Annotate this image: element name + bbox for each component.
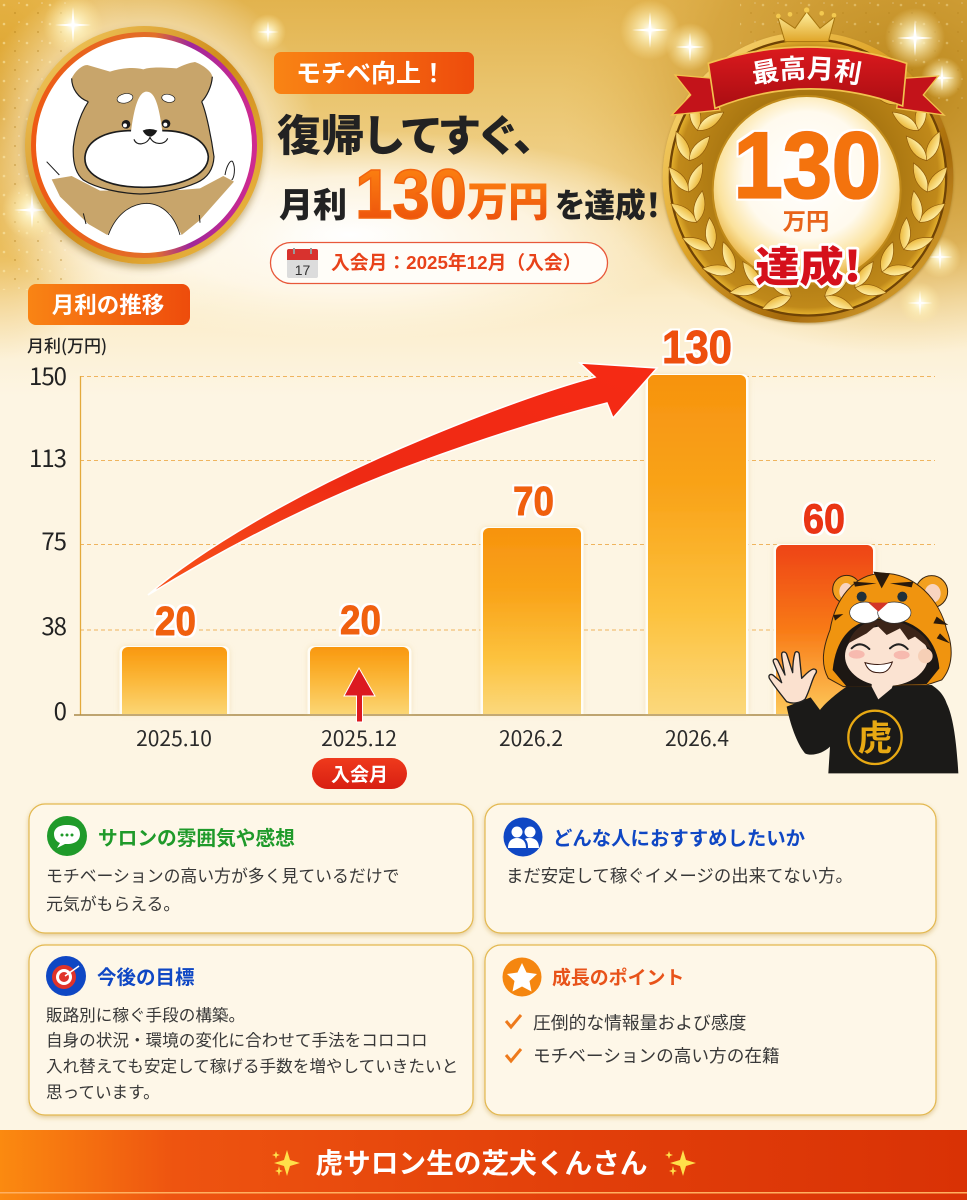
card: who to recommend — [485, 804, 936, 933]
section heading: monthly profit trend: 月利の推移 — [52, 293, 164, 318]
footer banner — [0, 1130, 967, 1200]
tag: motivation up — [274, 52, 474, 94]
y axis ticks: 0 — [54, 692, 67, 727]
avatar: shiba dog in gold ring — [25, 26, 263, 264]
icon: sparkle left — [272, 1150, 300, 1176]
title: 130 — [355, 155, 467, 233]
title: を達成！ — [555, 179, 661, 227]
card: salon atmosphere — [29, 804, 473, 933]
card: who to recommend: どんな人におすすめしたいか — [553, 828, 806, 850]
icon: calendar — [287, 248, 318, 278]
body text: モチベーションの高い方が多く見ているだけで — [46, 867, 399, 886]
card: salon atmosphere: サロンの雰囲気や感想 — [98, 827, 295, 850]
join month marker — [312, 758, 407, 789]
character: boy in tiger hood — [769, 572, 958, 773]
medal badge: 万円 — [783, 202, 829, 236]
x axis labels: 2026.4 — [665, 723, 729, 753]
title: 万円 — [467, 168, 549, 228]
card: future goals — [29, 945, 473, 1115]
bar 2026.2 — [480, 527, 584, 714]
value 60: 60 — [803, 495, 845, 542]
section heading: monthly profit trend — [28, 284, 190, 325]
arrow: growth trend — [148, 363, 657, 595]
logo: tiger kanji: 虎 — [858, 720, 892, 759]
x axis labels: 2026.2 — [499, 723, 563, 753]
checklist: モチベーションの高い方の在籍 — [533, 1046, 780, 1066]
bar 2026.4 — [646, 374, 748, 714]
medal badge: 130 — [734, 112, 881, 217]
join month marker: 入会月 — [331, 764, 388, 786]
x axis labels: 2025.12 — [321, 723, 397, 753]
icon: sparkle right — [665, 1150, 696, 1176]
card: future goals: 今後の目標 — [97, 967, 195, 989]
icon: calendar: 17 — [295, 262, 310, 278]
icon: laurel wreath — [665, 71, 951, 314]
x axis labels — [136, 723, 729, 753]
icon: target — [46, 956, 86, 996]
body text: 販路別に稼ぐ手段の構築。 — [46, 1006, 245, 1025]
join month pill: 入会月：2025年12月（入会） — [331, 251, 581, 273]
body text — [46, 1006, 458, 1102]
join month pill — [270, 242, 608, 284]
y axis ticks: 75 — [41, 522, 67, 557]
body text: まだ安定して稼ぐイメージの出来てない方。 — [506, 866, 853, 886]
ribbon: 最高月利 — [752, 56, 862, 85]
ribbon — [670, 46, 946, 116]
medal badge — [662, 8, 954, 326]
icon: chat bubble — [47, 816, 87, 856]
y axis ticks: 38 — [41, 607, 67, 642]
y axis ticks: 150 — [29, 357, 67, 392]
checklist: 圧倒的な情報量および感度 — [533, 1013, 747, 1033]
bar latest — [774, 544, 876, 714]
icon: crown — [776, 7, 836, 42]
tag: motivation up: モチベ向上！ — [296, 60, 446, 88]
card: growth points — [485, 945, 936, 1115]
y axis ticks: 113 — [29, 439, 66, 474]
title: 復帰してすぐ、 — [277, 102, 535, 164]
bar 2025.12 — [308, 646, 412, 714]
checklist — [506, 1013, 780, 1066]
body text: 思っています。 — [46, 1083, 160, 1102]
title — [277, 102, 661, 233]
logo: tiger kanji — [848, 711, 902, 764]
y axis title: 月利(万円) — [27, 332, 107, 357]
bar chart — [27, 321, 935, 789]
sparkles — [2, 0, 963, 324]
icon: star — [502, 958, 542, 996]
value 20: 20 — [155, 598, 196, 644]
y axis ticks — [29, 357, 67, 727]
body text: 元気がもらえる。 — [46, 895, 180, 914]
body text: 入れ替えても安定して稼げる手数を増やしていきたいと — [46, 1057, 458, 1076]
medal badge: 達成! — [755, 234, 861, 294]
title: 月利 — [279, 178, 347, 227]
value 130: 130 — [662, 321, 732, 373]
arrow: join marker — [344, 668, 375, 722]
footer banner: 虎サロン生の芝犬くんさん — [315, 1148, 648, 1179]
icon: people — [504, 818, 542, 856]
body text: 自身の状況・環境の変化に合わせて手法をコロコロ — [46, 1031, 428, 1050]
x axis labels: 2025.10 — [136, 723, 212, 753]
body text — [46, 867, 399, 914]
value 20 at join: 20 — [340, 597, 381, 643]
value 70: 70 — [513, 478, 554, 524]
card: growth points: 成長のポイント — [552, 966, 684, 989]
bar 2025.10 — [120, 646, 230, 714]
